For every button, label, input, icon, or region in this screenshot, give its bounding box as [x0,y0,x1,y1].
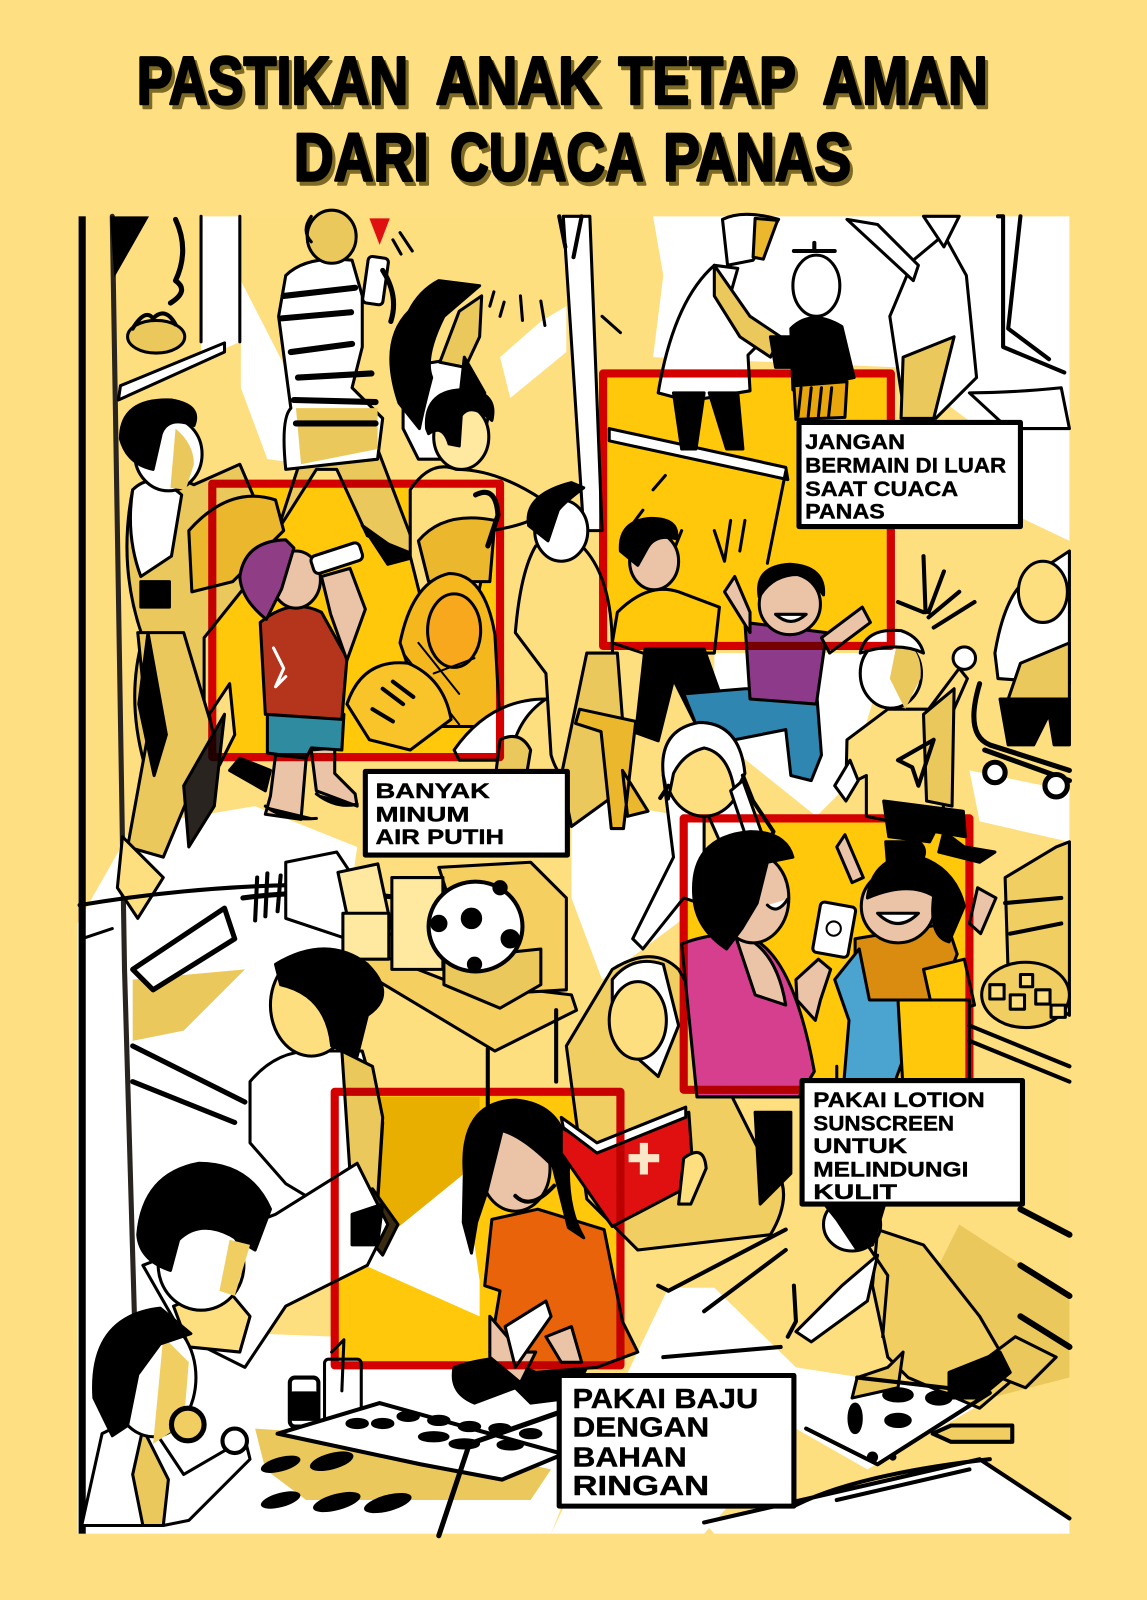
illustration panel [78,210,1069,1536]
title [137,44,991,200]
label: pakai baju: DENGAN [572,1412,709,1443]
woman with long black hair [391,281,620,459]
table with boxes [286,852,577,1120]
hijab woman with book [566,957,791,1250]
boy in black shirt [770,243,854,419]
label: pakai lotion: SUNSCREEN [813,1112,954,1136]
label: pakai lotion [802,1081,1022,1204]
title: ANAK [439,48,602,123]
red frame 3 fill [684,818,969,1090]
man sitting with black hair [410,390,544,602]
label: banyak minum: MINUM [376,802,469,826]
shirt [260,607,347,719]
red frame 2 [603,373,891,646]
label: pakai baju: BAHAN [572,1441,687,1472]
title: DARI [294,121,429,196]
title: AMAN [826,48,991,123]
food and stacks at right [898,842,1069,1090]
label: pakai lotion: MELINDUNGI [813,1158,968,1182]
label: pakai baju: PAKAI BAJU [572,1383,758,1414]
motion lines of ball [80,873,437,939]
woman in pink shirt [682,832,831,1097]
marker pen [933,1426,1012,1442]
straw hat child [454,699,546,781]
title: TETAP [618,44,796,119]
palm tree trunk [559,216,602,531]
title: ANAK [436,44,599,119]
paper with dark marks left [278,1403,563,1480]
label: jangan bermain: SAAT CUACA [805,477,958,501]
wall panel in frame 2 [609,429,788,602]
label: pakai lotion: PAKAI LOTION [813,1088,985,1112]
boy drinking water [230,540,365,819]
label: banyak minum: AIR PUTIH [376,825,504,849]
kid drawing on floor [788,1194,1069,1408]
legs and sandals [265,748,357,819]
title: CUACA [450,121,644,196]
paper right with marks [658,1230,990,1464]
shorts [267,709,344,758]
red frame 1 [212,484,500,757]
head [271,551,320,608]
cap [240,540,294,619]
title: PANAS [666,125,854,200]
dark oval marks [259,1448,414,1517]
label: jangan bermain [799,422,1020,527]
red frame 2 fill [603,373,891,646]
man with arms raised [847,216,1069,429]
red frame 1 fill [212,484,500,757]
title: PASTIKAN [140,48,411,123]
man in striped shirt [278,210,418,564]
baby with pacifier [82,1308,250,1526]
grass tuft [898,556,975,628]
red frame 4 fill [335,1092,620,1365]
red book [561,1107,706,1227]
title: AMAN [822,44,988,119]
hijab woman at top [658,214,781,449]
woman with orange hijab [400,573,500,727]
playing kid in purple [684,564,870,781]
label: jangan bermain: BERMAIN DI LUAR [805,453,1007,477]
glasses on floor [290,1340,361,1427]
girl with braids [633,722,774,949]
label: jangan bermain: PANAS [805,499,885,523]
label: pakai lotion: UNTUK [813,1134,908,1158]
red frame 3 [684,818,969,1090]
boy with paper plane shirt [835,630,995,867]
label: pakai lotion: KULIT [813,1180,897,1204]
label: pakai baju [559,1376,794,1506]
left person with sack [120,400,284,791]
left figure leaning [117,633,235,918]
hijab woman on wheelchair [974,551,1069,797]
title: PANAS [663,121,851,196]
label: pakai baju: RINGAN [572,1470,709,1501]
person with black hair and white shirt [133,908,398,1255]
seated curly kid [138,1163,388,1367]
playing kid in yellow [612,518,730,741]
left vertical frame lines [79,216,149,1534]
sack near woman [347,663,451,750]
label: jangan bermain: JANGAN [805,430,905,454]
white light patches [78,216,1069,1534]
title: DARI [297,125,432,200]
arm and bottle [321,568,365,660]
girl in blue overalls [812,835,996,1082]
girl in orange shirt [453,1100,638,1403]
soft yellow washes [133,969,1069,1500]
soccer ball [429,882,522,971]
large paper center floor [439,1408,571,1536]
label: banyak minum: BANYAK [376,779,491,803]
paper bottom right [704,1459,1069,1522]
panel base colour [78,216,1069,1534]
label: banyak minum [365,771,567,855]
man in yellow shirt [515,483,648,829]
title: CUACA [453,125,647,200]
title: PASTIKAN [137,44,408,119]
shelf with bowl [118,216,240,400]
red frame 4 [335,1092,620,1365]
title: TETAP [621,48,799,123]
